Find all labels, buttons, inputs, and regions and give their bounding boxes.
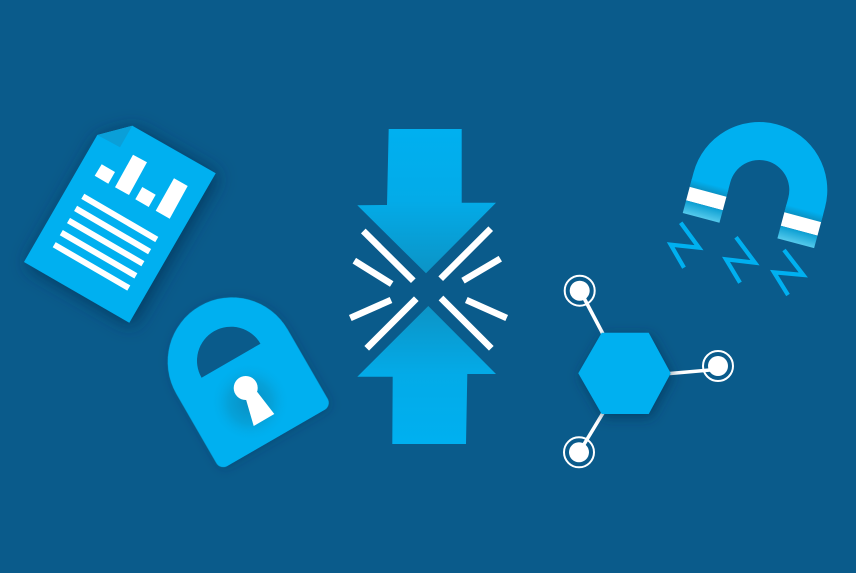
- icon: padlock: [144, 274, 332, 470]
- magnetic sparks: [671, 223, 803, 295]
- lock opening: [185, 314, 260, 378]
- icon: horseshoe magnet: [671, 107, 843, 295]
- keyhole glow: [210, 362, 290, 442]
- text lines: [54, 196, 157, 288]
- impact lines: [350, 229, 507, 348]
- mini bar chart: [95, 155, 188, 219]
- keyhole: [234, 376, 274, 426]
- node bottom: [564, 437, 594, 467]
- document page: [24, 126, 216, 323]
- node right: [703, 351, 733, 381]
- arrow pointing up: [357, 306, 496, 444]
- icon: document with chart: [24, 126, 216, 323]
- arrow pointing down: [357, 129, 496, 273]
- node top: [565, 276, 595, 306]
- hexagon: [578, 333, 671, 414]
- icon: compression arrows: [350, 129, 507, 444]
- page fold: [97, 126, 132, 147]
- magnet body: [683, 107, 843, 248]
- connectors: [583, 298, 710, 446]
- lock body: [144, 274, 332, 470]
- icon: molecule hexagon: [564, 276, 733, 467]
